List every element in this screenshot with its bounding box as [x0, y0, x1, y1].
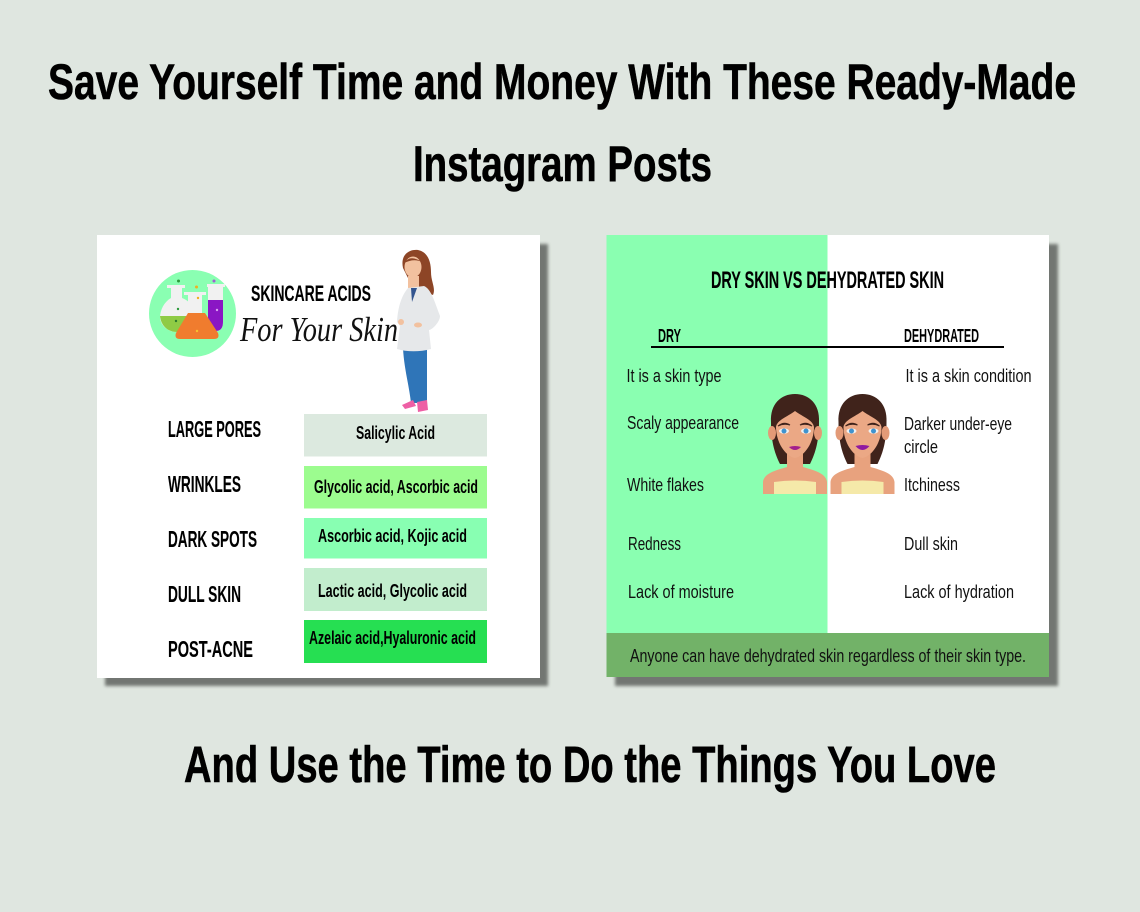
list: dehydrated: Darker under-eye	[904, 414, 1012, 434]
row: large pores: LARGE PORES	[168, 416, 261, 442]
list: dry: White flakes	[627, 475, 704, 495]
row: dull skin: Lactic acid, Glycolic acid	[318, 581, 467, 601]
row: dark spots: Ascorbic acid, Kojic acid	[318, 526, 467, 546]
heading: for your skin: For Your Skin	[239, 310, 398, 349]
icon: face dry	[763, 394, 827, 494]
callout bar: Anyone can have dehydrated skin regardless of their skin type.	[630, 646, 1026, 666]
row: large pores: Salicylic Acid	[356, 423, 435, 443]
list: dry: Redness	[628, 534, 681, 554]
list: dry: Scaly appearance	[627, 413, 739, 433]
row: wrinkles	[168, 466, 487, 508]
row: dark spots: DARK SPOTS	[168, 526, 257, 552]
list: dry: Lack of moisture	[628, 582, 734, 602]
list: dry: It is a skin type	[626, 366, 722, 386]
list: dehydrated: Itchiness	[904, 475, 960, 495]
row: dark spots	[168, 518, 487, 558]
heading: dry vs dehydrated: DRY SKIN VS DEHYDRATED SKIN	[711, 267, 944, 294]
row: dull skin: DULL SKIN	[168, 581, 241, 607]
icon: flasks	[149, 270, 236, 357]
icon: scientist	[397, 250, 440, 412]
list: dry	[626, 366, 739, 602]
list: dehydrated: It is a skin condition	[906, 366, 1032, 386]
heading: skincare acids: SKINCARE ACIDS	[251, 281, 371, 306]
row: large pores	[168, 414, 487, 456]
list: dehydrated: circle	[904, 437, 938, 457]
column label: dehydrated: DEHYDRATED	[904, 326, 979, 346]
row: post-acne: POST-ACNE	[168, 636, 253, 662]
row: post-acne: Azelaic acid,Hyaluronic acid	[309, 628, 476, 648]
column label: dry: DRY	[658, 326, 681, 346]
list: dehydrated	[904, 366, 1032, 602]
list: dehydrated: Dull skin	[904, 534, 958, 554]
row: post-acne	[168, 620, 487, 663]
list: dehydrated: Lack of hydration	[904, 582, 1014, 602]
callout bar	[606, 633, 1049, 677]
row: dull skin	[168, 568, 487, 611]
row: wrinkles: Glycolic acid, Ascorbic acid	[314, 477, 478, 497]
row: wrinkles: WRINKLES	[168, 471, 241, 497]
icon: face dehydrated	[830, 394, 894, 494]
title line two: Instagram Posts	[413, 136, 712, 192]
panel: dry vs dehydrated	[606, 235, 1058, 686]
panel: skincare acids	[97, 235, 548, 686]
